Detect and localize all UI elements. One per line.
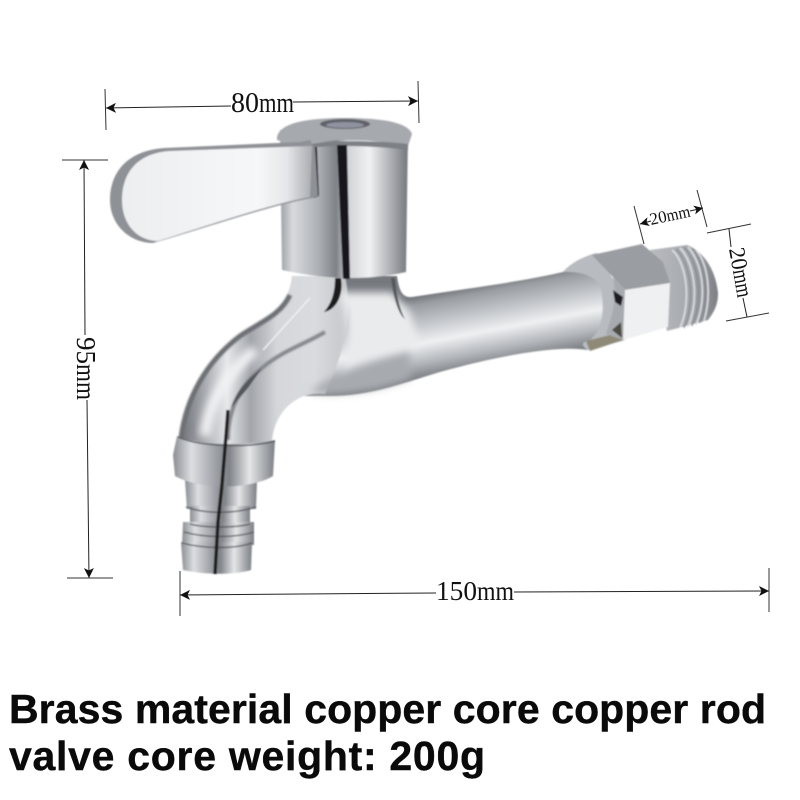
dimension: 80mm width	[105, 81, 419, 130]
label: 80mm: 80	[231, 87, 259, 119]
dimension: 95mm height	[62, 160, 113, 578]
horizontal pipe and central body	[300, 253, 625, 396]
label: 150mm: mm	[477, 576, 514, 606]
dimension: 150mm length	[180, 568, 769, 616]
body shadow band	[310, 352, 410, 393]
top cap inset	[320, 119, 370, 129]
collar behind hex	[563, 253, 625, 350]
valve cylinder	[277, 118, 412, 279]
spout dark reflections	[231, 368, 262, 408]
lever handle	[110, 140, 318, 243]
spout bend	[180, 276, 348, 445]
label: 20mm horizontal: mm	[665, 202, 692, 225]
dimension: 20mm hex length	[634, 190, 707, 244]
dark vertical reflection	[337, 145, 350, 279]
dimension: 20mm thread diameter	[707, 224, 769, 321]
label: 95mm: 95	[71, 337, 101, 364]
nozzle dark line	[215, 410, 228, 574]
caption text: Brass material copper core copper rod	[9, 686, 766, 732]
hose nozzle	[181, 480, 257, 574]
label: 150mm: 150	[436, 576, 477, 606]
caption text	[9, 686, 766, 779]
spout outer shadow	[181, 295, 290, 438]
label: 20mm horizontal: 20	[648, 207, 668, 229]
label: 20mm vertical: mm	[728, 267, 757, 299]
body soft highlight	[338, 292, 420, 385]
right neck reflection	[391, 278, 405, 319]
hex nut	[592, 244, 670, 340]
hose ring	[173, 436, 275, 486]
spout shadow line	[228, 332, 325, 440]
label: 80mm: mm	[259, 87, 294, 119]
icon: chrome faucet	[110, 118, 718, 574]
label: 20mm vertical: 20	[724, 246, 753, 272]
dark reflection at neck	[324, 278, 342, 312]
threaded end	[650, 245, 718, 331]
caption text: valve core weight: 200g	[9, 733, 485, 779]
spout highlight	[205, 350, 255, 436]
label: 95mm: mm	[71, 364, 101, 400]
